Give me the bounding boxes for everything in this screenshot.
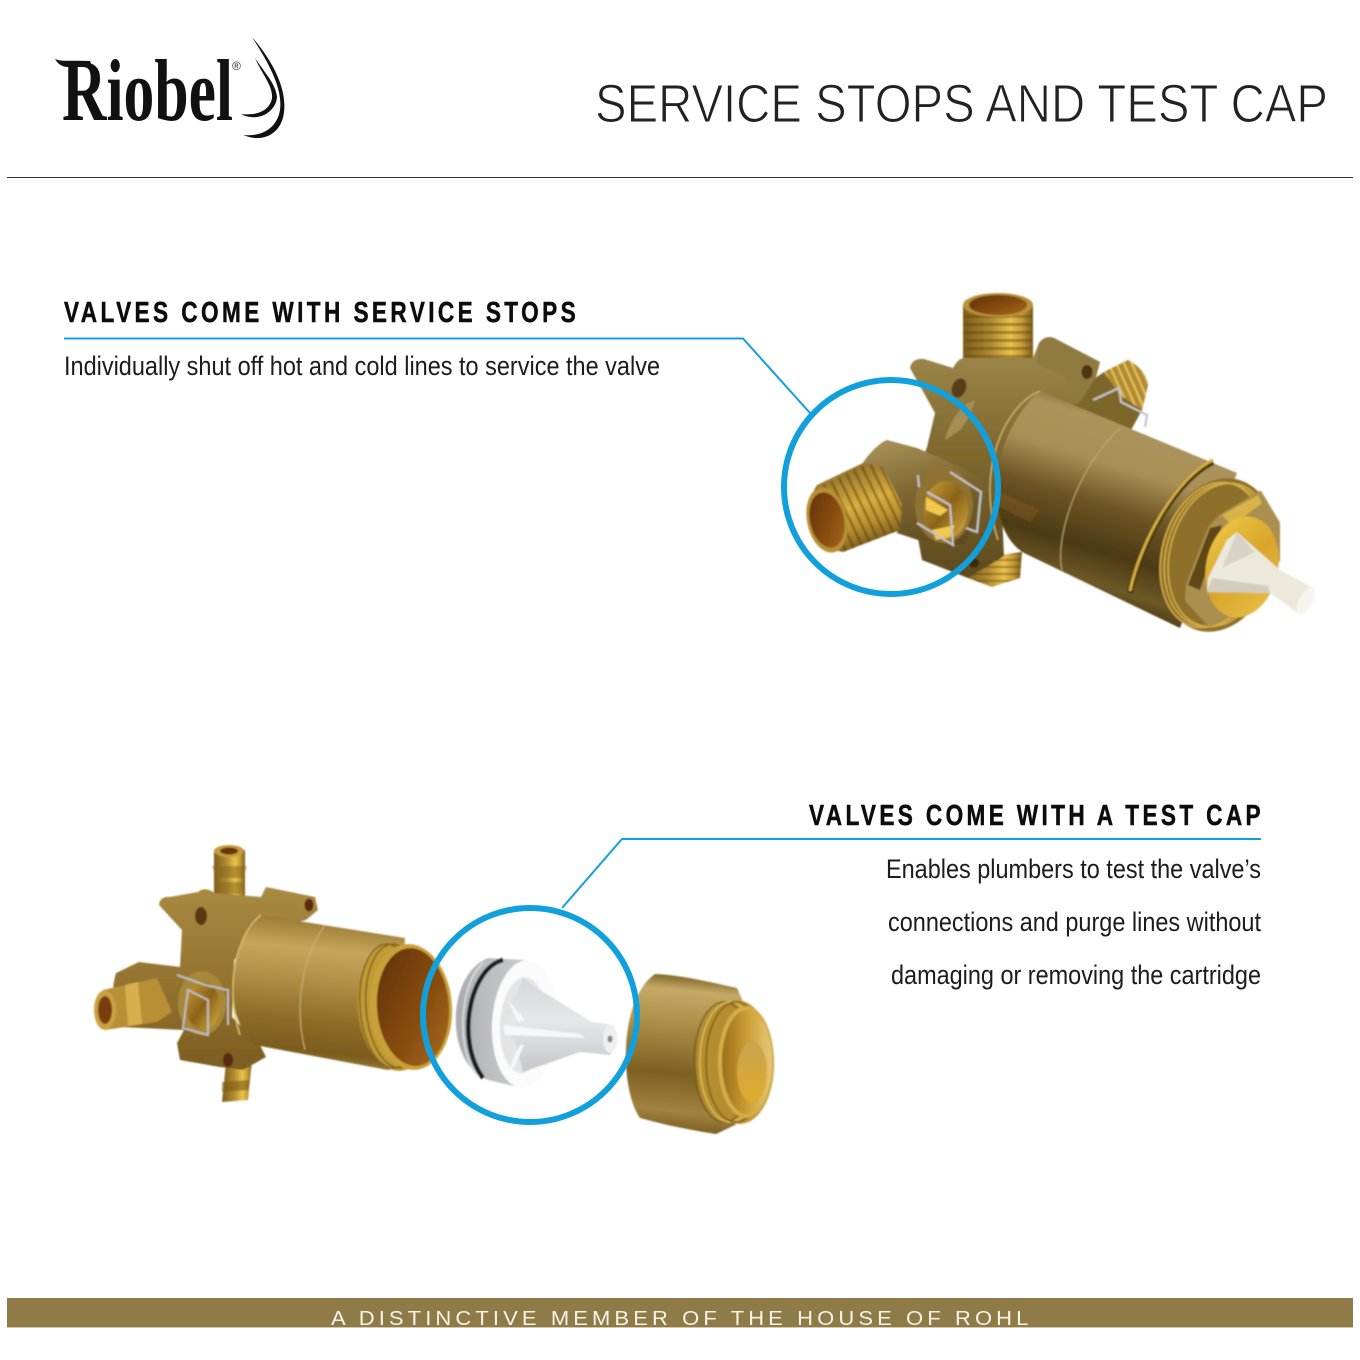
band lower highlight <box>7 1327 1353 1328</box>
description line 3: damaging or removing the cartridge <box>891 960 1261 990</box>
service stop wire clips <box>917 388 1147 545</box>
bottom PEX port <box>222 1060 252 1102</box>
highlight circle <box>423 908 637 1122</box>
leader line <box>562 839 1261 908</box>
illustration: brass retaining nut <box>626 974 776 1134</box>
elbow casting <box>862 440 985 545</box>
callout circle and leader: test cap <box>423 839 1261 1122</box>
nut opening <box>718 1006 774 1118</box>
leader line <box>64 338 810 413</box>
bottom threaded port <box>965 552 1022 590</box>
callout circle and leader: service stops <box>64 338 998 594</box>
logo wordmark: Riobel <box>62 43 233 140</box>
band background <box>7 1298 1353 1327</box>
threaded open end <box>354 941 456 1073</box>
heading: service stops: VALVES COME WITH SERVICE STOPS <box>64 295 576 329</box>
cap recessed centre <box>498 976 548 1074</box>
dark bevel <box>1188 525 1222 590</box>
opening <box>1196 510 1288 624</box>
cylinder front threads and face <box>1143 465 1293 645</box>
top PEX port <box>212 845 247 900</box>
logo: Riobel <box>55 37 284 140</box>
white test stem <box>1207 532 1319 618</box>
nut body <box>626 974 760 1134</box>
nut threaded collar <box>694 999 776 1125</box>
section: service stops text <box>64 295 660 381</box>
cap white face <box>489 958 561 1090</box>
cast body and lugs <box>113 887 318 1070</box>
cone with ribs <box>503 978 617 1072</box>
illustration: white test cap <box>456 958 617 1090</box>
thread band <box>1143 465 1293 645</box>
footer text: A DISTINCTIVE MEMBER OF THE HOUSE OF ROHL <box>331 1308 1028 1330</box>
hex face <box>1187 493 1278 625</box>
left PEX port <box>94 978 172 1030</box>
service stop cavity <box>915 467 973 543</box>
main cylinder <box>990 391 1237 628</box>
service stop with wire clip <box>177 971 228 1035</box>
black O-ring <box>468 960 503 1078</box>
logo swoosh <box>241 37 284 138</box>
description line 2: connections and purge lines without <box>888 907 1261 937</box>
back right threaded port <box>1073 359 1149 430</box>
header divider <box>7 177 1353 178</box>
registered mark: ® <box>232 59 241 73</box>
main cylinder <box>232 915 405 1070</box>
heading: test cap: VALVES COME WITH A TEST CAP <box>809 798 1261 832</box>
description: service stops: Individually shut off hot and cold lines to service the valve <box>64 351 660 381</box>
highlight circle <box>784 380 998 594</box>
description line 1: Enables plumbers to test the valve’s <box>886 854 1261 884</box>
cap side wall <box>456 958 525 1088</box>
illustration: brass valve with threaded ports <box>801 293 1319 645</box>
light band on cap side <box>463 963 483 1077</box>
illustration: valve body with PEX ports <box>94 845 456 1102</box>
footer band <box>7 1298 1353 1330</box>
logo flag on R <box>55 59 92 67</box>
top threaded port <box>963 293 1033 362</box>
section: test cap text <box>809 798 1261 990</box>
cast body and mounting lugs <box>897 337 1100 578</box>
bright bevel <box>1222 495 1262 526</box>
left threaded port <box>801 463 905 556</box>
